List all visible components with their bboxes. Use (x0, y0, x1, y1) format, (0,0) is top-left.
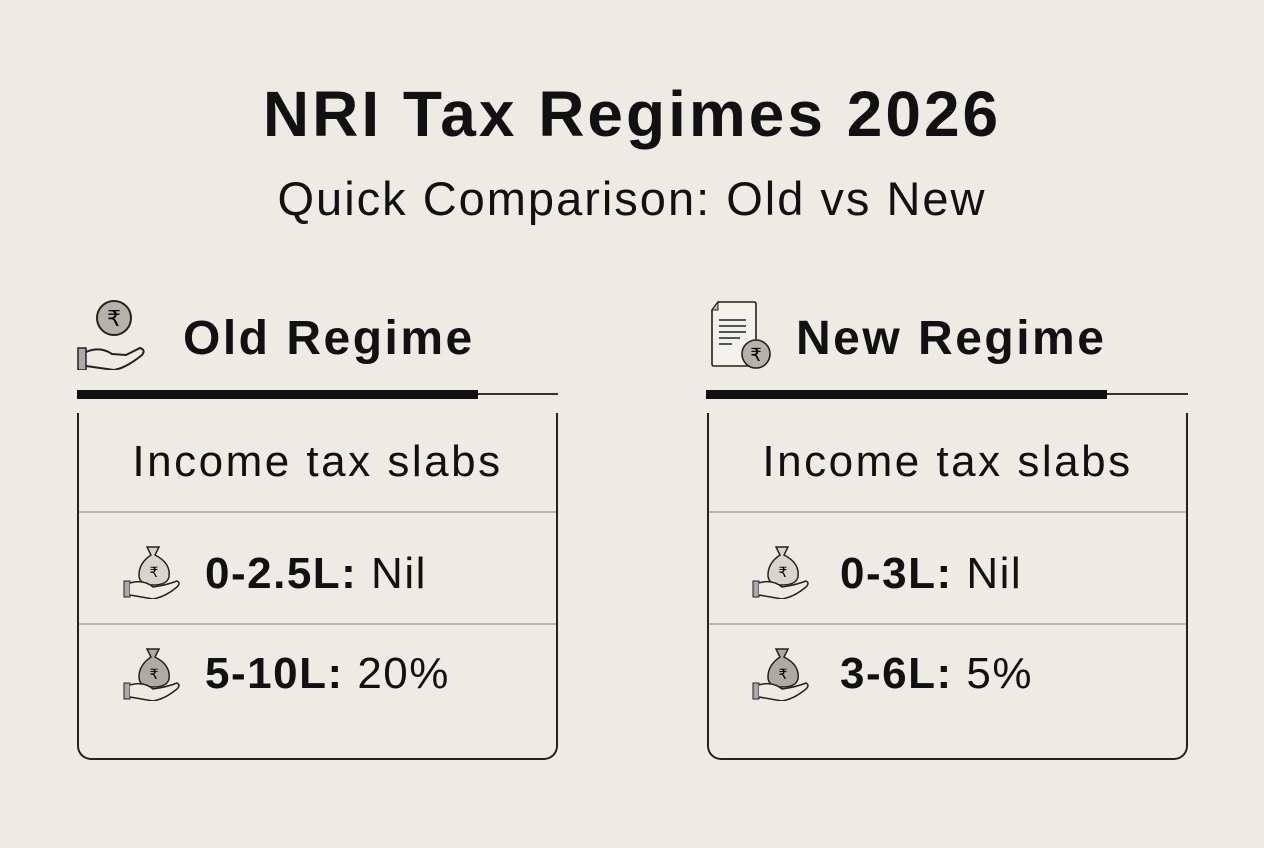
row: 5-10L 20%: 5-10L: 20% (205, 649, 450, 698)
icon: money bag (124, 648, 180, 701)
row: 3-6L 5%: 3-6L: 5% (840, 649, 1033, 698)
table box (707, 413, 1188, 760)
row: 5-10L 20% (124, 648, 450, 701)
icon: money bag (124, 546, 180, 599)
header: Income tax slabs: Income tax slabs (762, 437, 1133, 486)
icon: money bag (752, 546, 809, 599)
icon: money bag (752, 648, 809, 701)
subtitle: Quick Comparison: Old vs New (278, 172, 986, 225)
row: 0-3L Nil (752, 546, 1022, 599)
row: 0-3L Nil: 0-3L: Nil (840, 549, 1022, 598)
panel: new regime (706, 300, 1188, 760)
header: Income tax slabs: Income tax slabs (132, 437, 503, 486)
icon: money bag: ₹ (779, 667, 788, 683)
row: 0-2.5L Nil (124, 546, 427, 599)
underline (706, 390, 1107, 399)
icon: document with rupee coin (711, 300, 771, 369)
row: 0-2.5L Nil: 0-2.5L: Nil (205, 549, 427, 598)
icon: hand with rupee coin: ₹ (107, 307, 121, 332)
title: NRI Tax Regimes 2026 (263, 78, 1001, 150)
table box (77, 413, 558, 760)
heading: Old Regime: Old Regime (183, 312, 475, 365)
icon: money bag: ₹ (779, 565, 788, 581)
panel: old regime (77, 300, 558, 760)
icon: document with rupee coin: ₹ (750, 345, 762, 366)
underline (77, 390, 478, 399)
icon: hand with rupee coin (77, 300, 145, 370)
heading: New Regime: New Regime (796, 312, 1106, 365)
icon: money bag: ₹ (150, 667, 159, 683)
icon: money bag: ₹ (150, 565, 159, 581)
row: 3-6L 5% (752, 648, 1033, 701)
